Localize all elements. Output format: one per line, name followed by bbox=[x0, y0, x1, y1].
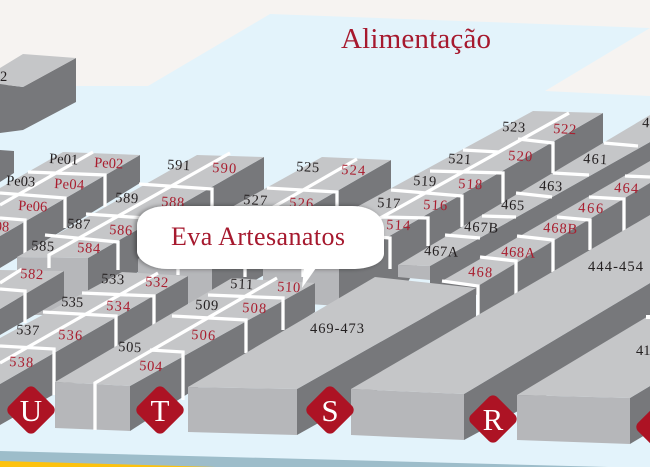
row: 532 to 538: 534 bbox=[106, 298, 131, 315]
row: 514 to 523: 523 bbox=[502, 119, 526, 136]
street marker T: T bbox=[151, 393, 170, 428]
row: 514 to 523: 521 bbox=[448, 151, 472, 168]
row: 464 to 468: 468 bbox=[468, 264, 493, 281]
row: 585 to 591: 589 bbox=[115, 190, 139, 207]
street marker R bbox=[467, 393, 519, 445]
row: 514 to 523: 522 bbox=[553, 121, 577, 138]
row: 585 to 591: 588 bbox=[161, 194, 185, 211]
row: 524 to 527: 527 bbox=[243, 192, 268, 209]
row: 464 to 468: 468B bbox=[543, 220, 578, 238]
callout: Eva Artesanatos: Eva Artesanatos bbox=[171, 222, 345, 251]
block: 469-473 bbox=[188, 277, 476, 435]
row: 582: 582 bbox=[20, 266, 44, 283]
block: 444-454 bbox=[351, 215, 650, 440]
street marker U bbox=[5, 384, 57, 436]
row: 514 to 523: 519 bbox=[413, 173, 437, 190]
row: 585 to 591 bbox=[17, 153, 264, 315]
row: 532 to 538: 536 bbox=[58, 327, 83, 344]
row: Pe01 to Pe08: Pe04 bbox=[54, 176, 85, 194]
row: 461 to 467A bbox=[398, 115, 650, 320]
row: 585 to 591: 584 bbox=[77, 240, 101, 257]
row: 514 to 523 bbox=[263, 111, 603, 310]
row: 582 bbox=[0, 266, 64, 335]
street marker S bbox=[304, 384, 356, 436]
street marker S: S bbox=[321, 393, 339, 428]
street marker Q bbox=[634, 401, 650, 453]
row: 461 to 467A: 467B bbox=[464, 219, 499, 237]
block: left edge fragment bbox=[0, 150, 14, 182]
row: 585 to 591: 591 bbox=[167, 157, 191, 174]
row: 464 to 468 bbox=[442, 161, 650, 340]
row: 504 to 511: 508 bbox=[242, 300, 267, 317]
row: 504 to 511: 509 bbox=[195, 297, 219, 314]
row: 532 to 538: 537 bbox=[16, 322, 40, 339]
row: 585 to 591: 586 bbox=[109, 222, 133, 239]
heading: Alimentação: Alimentação bbox=[341, 23, 491, 55]
row: 504 to 511: 504 bbox=[139, 358, 163, 375]
row: Pe01 to Pe08: Pe02 bbox=[94, 155, 124, 173]
block: upper left: 2 bbox=[0, 69, 7, 85]
row: 532 to 538: 533 bbox=[101, 271, 125, 288]
block: 469-473: 469-473 bbox=[310, 321, 364, 337]
block: 444-454: 444-454 bbox=[588, 259, 644, 275]
row: 464 to 468: 466 bbox=[578, 200, 604, 217]
block: upper left bbox=[0, 54, 76, 133]
street marker T bbox=[134, 384, 186, 436]
street marker U: U bbox=[20, 393, 42, 428]
row: 524 to 527 bbox=[138, 157, 391, 305]
road band bbox=[0, 451, 608, 467]
row: 514 to 523: 518 bbox=[458, 176, 483, 193]
row: 524 to 527: 524 bbox=[341, 162, 366, 179]
row: 464 to 468: 468A bbox=[501, 244, 536, 262]
row: 504 to 511: 505 bbox=[118, 339, 142, 356]
row: 504 to 511: 510 bbox=[277, 279, 301, 296]
row: Pe01 to Pe08 bbox=[0, 151, 140, 270]
row: 461 to 467A: 467A bbox=[424, 243, 459, 261]
row: 514 to 523: 517 bbox=[377, 195, 401, 212]
row: Pe01 to Pe08: Pe01 bbox=[49, 151, 79, 169]
row: 585 to 591: 587 bbox=[67, 216, 91, 233]
row: 524 to 527: 526 bbox=[289, 195, 314, 212]
row: 585 to 591: 585 bbox=[31, 238, 55, 255]
street marker R: R bbox=[483, 402, 504, 437]
row: 514 to 523: 516 bbox=[423, 197, 448, 214]
row: 532 to 538: 532 bbox=[145, 274, 169, 291]
row: 461 to 467A: 465 bbox=[501, 197, 525, 214]
row: 504 to 511: 506 bbox=[191, 327, 216, 344]
row: 504 to 511 bbox=[55, 276, 315, 431]
row: 532 to 538: 538 bbox=[9, 354, 34, 371]
yellow road edge bbox=[0, 461, 216, 467]
row: 504 to 511: 511 bbox=[230, 276, 254, 293]
row: 532 to 538: 535 bbox=[61, 294, 84, 311]
callout: Eva Artesanatos bbox=[137, 206, 384, 288]
row: Pe01 to Pe08: Pe06 bbox=[18, 198, 48, 216]
row: Pe01 to Pe08: Pe03 bbox=[6, 173, 36, 191]
row: 524 to 527: 525 bbox=[296, 159, 320, 176]
row: 585 to 591: 590 bbox=[212, 160, 237, 177]
row: 532 to 538 bbox=[0, 271, 188, 425]
block: 41 bbox=[517, 315, 650, 444]
row: 514 to 523: 520 bbox=[508, 148, 533, 165]
row: 461 to 467A: 461 bbox=[583, 151, 608, 168]
row: 464 to 468: 464 bbox=[614, 180, 639, 197]
row: 461 to 467A: 463 bbox=[539, 178, 563, 195]
row: 514 to 523: 514 bbox=[386, 217, 411, 234]
